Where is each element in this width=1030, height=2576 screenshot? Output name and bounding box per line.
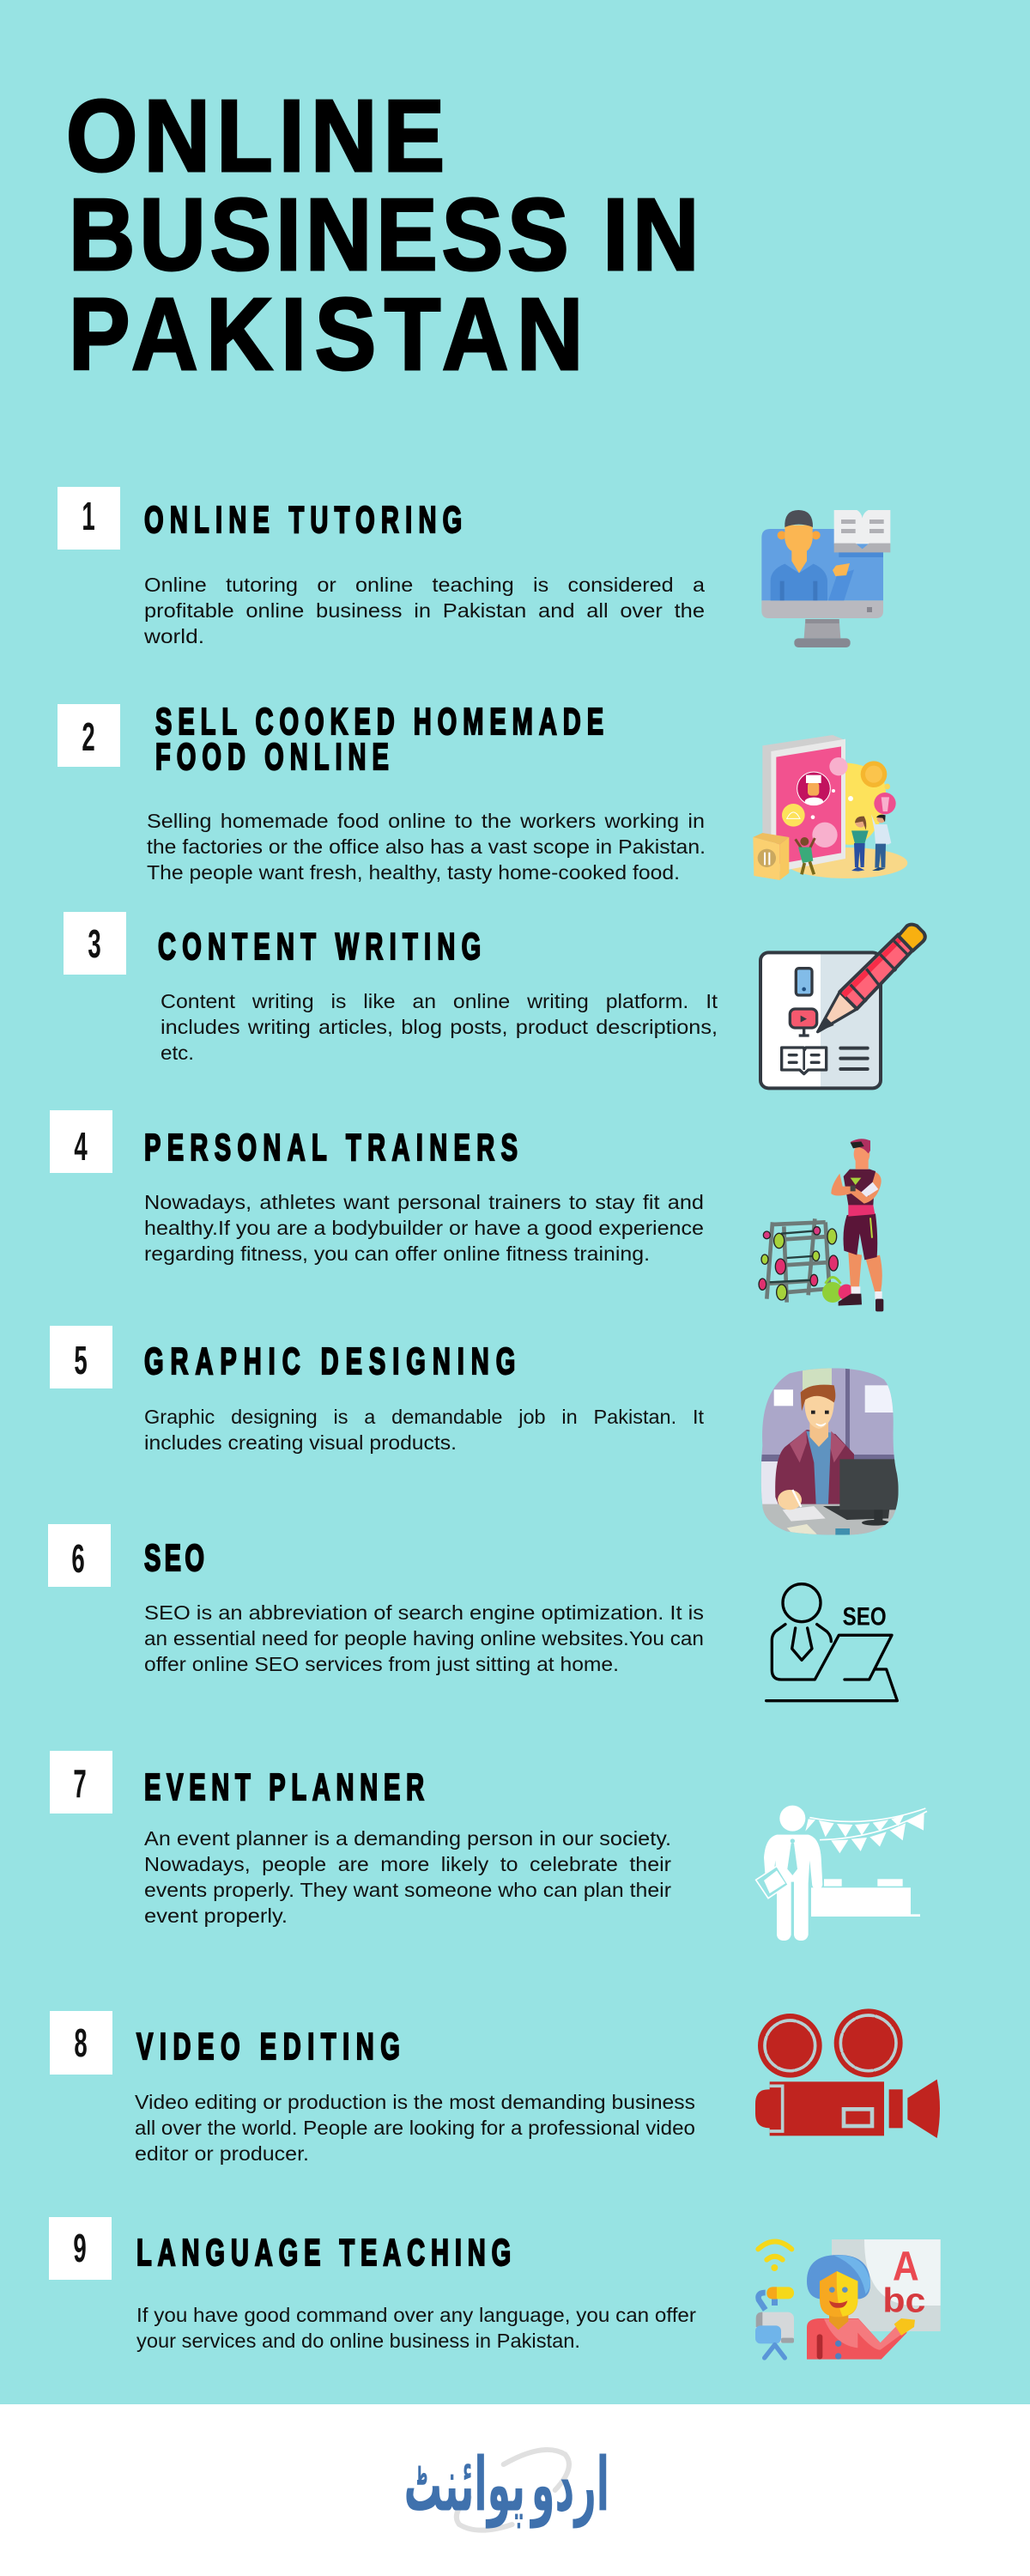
text block: seo: SEO is an abbreviation of search engine optimization. It is: [144, 1601, 704, 1624]
text block: language teaching: [136, 2304, 696, 2352]
heading: personal trainers: PERSONAL TRAINERS: [144, 1126, 518, 1168]
text block: content writing: etc.: [161, 1042, 194, 1064]
heading: online tutoring: ONLINE TUTORING: [144, 498, 462, 540]
number badge 5: 5: [74, 1340, 88, 1383]
heading: graphic designing: GRAPHIC DESIGNING: [144, 1340, 515, 1382]
text block: content writing: includes writing articles, blog posts, product descriptions,: [161, 1016, 718, 1038]
icon: seo specialist outline: SEO: [843, 1603, 887, 1631]
heading: sell cooked homemade food online: [155, 700, 603, 777]
text block: event planner: Nowadays, people are more likely to celebrate their: [144, 1853, 671, 1875]
text block: video editing: Video editing or production is the most demanding business: [135, 2091, 695, 2113]
icon: red film camera: [755, 2008, 940, 2138]
panel: language teaching: [49, 2217, 941, 2360]
number badge 3: [64, 912, 126, 975]
heading: event planner: EVENT PLANNER: [144, 1765, 424, 1807]
text block: seo: an essential need for people having online websites.You can: [144, 1627, 704, 1649]
text block: event planner: [144, 1827, 671, 1927]
panel: content writing: [64, 912, 925, 1088]
text block: homemade food: the factories or the office also has a vast scope in Pakistan.: [147, 835, 706, 858]
number badge 8: [50, 2011, 112, 2075]
heading: content writing: CONTENT WRITING: [158, 925, 481, 967]
text block: graphic designing: Graphic designing is a demandable job in Pakistan. It: [144, 1406, 705, 1428]
icon: food ordering tablet: [753, 735, 907, 880]
text block: event planner: An event planner is a demanding person in our society.: [144, 1827, 671, 1850]
number badge 5: [50, 1326, 112, 1388]
text block: video editing: [135, 2091, 695, 2165]
text block: language teaching: If you have good command over any language, you can offer: [136, 2304, 696, 2326]
panel: video editing: [50, 2008, 940, 2165]
text block: seo: offer online SEO services from just sitting at home.: [144, 1653, 619, 1675]
icon: online language teacher: A: [893, 2243, 919, 2289]
number badge 8: 8: [74, 2022, 88, 2066]
panel: personal trainers: [50, 1110, 883, 1311]
title: ONLINE: [66, 79, 445, 192]
title: BUSINESS IN: [69, 178, 699, 291]
title: [66, 79, 699, 391]
text block: graphic designing: [144, 1406, 705, 1454]
text block: homemade food: [147, 810, 706, 884]
number badge 3: 3: [88, 923, 101, 967]
heading: video editing: VIDEO EDITING: [136, 2025, 400, 2067]
number badge 6: 6: [71, 1538, 85, 1582]
number badge 2: [58, 704, 120, 767]
text block: event planner: events properly. They want someone who can plan their: [144, 1879, 671, 1901]
heading: sell cooked homemade food online: FOOD ONLINE: [155, 735, 389, 777]
text block: graphic designing: includes creating visual products.: [144, 1431, 457, 1454]
footer band: [0, 2404, 1030, 2576]
icon: tutor on monitor with book: [761, 510, 890, 647]
number badge 9: 9: [73, 2227, 87, 2271]
text block: seo: [144, 1601, 704, 1675]
logo: urdupoint: [404, 2442, 609, 2530]
icon: online language teacher: bc: [882, 2282, 925, 2320]
text block: personal trainers: regarding fitness, you can offer online fitness training.: [144, 1242, 650, 1265]
icon: document and pencil: [760, 925, 925, 1088]
panel: sell cooked homemade food online: [58, 700, 907, 884]
icon: fitness trainer with weights: [759, 1139, 883, 1311]
number badge 4: [50, 1110, 112, 1173]
number badge 7: 7: [73, 1763, 87, 1807]
heading: sell cooked homemade food online: SELL COOKED HOMEMADE: [155, 700, 603, 742]
text block: video editing: all over the world. People are looking for a professional video: [135, 2117, 695, 2139]
icon: online language teacher: [755, 2239, 941, 2360]
number badge 7: [50, 1751, 112, 1814]
panel: event planner: [50, 1751, 927, 1941]
panel: seo: [48, 1524, 897, 1701]
number badge 4: 4: [74, 1126, 88, 1170]
text block: online tutoring: Online tutoring or online teaching is considered a: [144, 574, 705, 596]
heading: language teaching: LANGUAGE TEACHING: [136, 2231, 511, 2273]
icon: event planner figure with bunting: [756, 1806, 927, 1941]
panel: online tutoring: [58, 487, 890, 647]
text block: online tutoring: [143, 574, 705, 647]
text block: video editing: editor or producer.: [135, 2142, 309, 2165]
icon: seo specialist outline: [766, 1584, 897, 1701]
icon: graphic designer at desk: [760, 1369, 899, 1535]
title: PAKISTAN: [69, 277, 583, 391]
text block: event planner: event properly.: [144, 1905, 288, 1927]
text block: personal trainers: [144, 1191, 704, 1265]
text block: content writing: [161, 990, 718, 1064]
number badge 6: [48, 1524, 111, 1587]
text block: online tutoring: world.: [143, 625, 204, 647]
text block: personal trainers: Nowadays, athletes want personal trainers to stay fit and: [144, 1191, 704, 1213]
heading: seo: SEO: [144, 1536, 204, 1578]
text block: online tutoring: profitable online business in Pakistan and all over the: [144, 599, 705, 622]
panel: graphic designing: [50, 1326, 904, 1539]
text block: content writing: Content writing is like an online writing platform. It: [161, 990, 718, 1012]
text block: homemade food: The people want fresh, healthy, tasty home-cooked food.: [147, 861, 680, 884]
number badge 1: [58, 487, 120, 550]
text block: homemade food: Selling homemade food online to the workers working in: [147, 810, 705, 832]
text block: language teaching: your services and do online business in Pakistan.: [136, 2330, 580, 2352]
number badge 2: 2: [82, 716, 95, 760]
number badge 9: [49, 2217, 112, 2280]
logo: urdupoint: اردو پوائنٹ: [404, 2442, 609, 2528]
text block: personal trainers: healthy.If you are a bodybuilder or have a good experience: [144, 1217, 704, 1239]
number badge 1: 1: [82, 495, 95, 539]
